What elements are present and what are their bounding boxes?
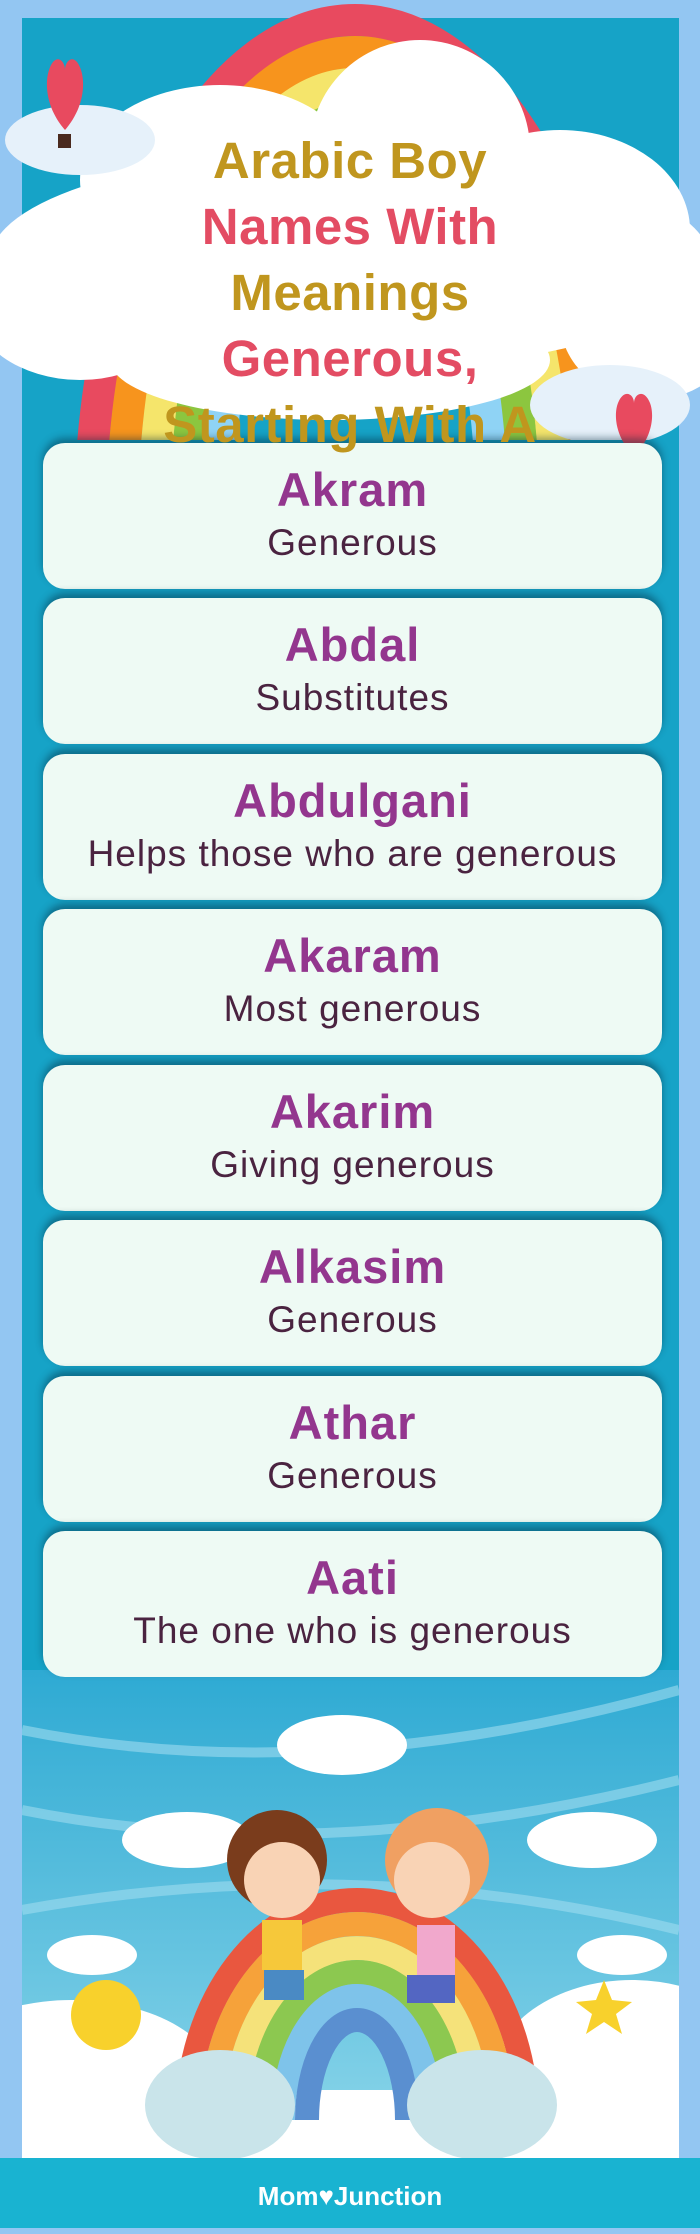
card: Alkasim: Generous [267, 1299, 438, 1340]
card: Alkasim: Alkasim [259, 1240, 446, 1293]
card: Abdulgani [43, 754, 662, 900]
card: Alkasim [43, 1220, 662, 1366]
card: Abdulgani: Helps those who are generous [88, 833, 617, 874]
footer with logo [0, 2158, 700, 2228]
bottom scene [22, 1670, 679, 2158]
card: Akaram: Most generous [224, 988, 481, 1029]
card: Abdulgani: Abdulgani [233, 774, 472, 827]
icon: hot air balloon right [616, 394, 652, 444]
card: Akaram [43, 909, 662, 1055]
footer with logo: Mom♥Junction [258, 2181, 442, 2211]
card: Aati [43, 1531, 662, 1677]
card: Akram [43, 443, 662, 589]
card: Athar: Athar [289, 1396, 416, 1449]
title: Starting With A [163, 396, 537, 453]
card: Aati: The one who is generous [133, 1610, 572, 1651]
card: Akram: Generous [267, 522, 438, 563]
card: Abdal: Abdal [285, 618, 420, 671]
title: Names With [202, 198, 498, 255]
card: Akarim [43, 1065, 662, 1211]
card: Akram: Akram [277, 463, 428, 516]
title: Meanings [230, 264, 470, 321]
card: Athar [43, 1376, 662, 1522]
title [163, 132, 537, 453]
header decoration: rainbow and clouds [0, 4, 700, 440]
title: Generous, [222, 330, 478, 387]
card: Athar: Generous [267, 1455, 438, 1496]
card: Akarim: Giving generous [210, 1144, 495, 1185]
card: Akaram: Akaram [263, 929, 442, 982]
card: Abdal: Substitutes [255, 677, 450, 718]
card: Akarim: Akarim [270, 1085, 435, 1138]
icon: hot air balloon left [46, 59, 84, 148]
card: Abdal [43, 598, 662, 744]
card: Aati: Aati [306, 1551, 399, 1604]
title: Arabic Boy [213, 132, 487, 189]
